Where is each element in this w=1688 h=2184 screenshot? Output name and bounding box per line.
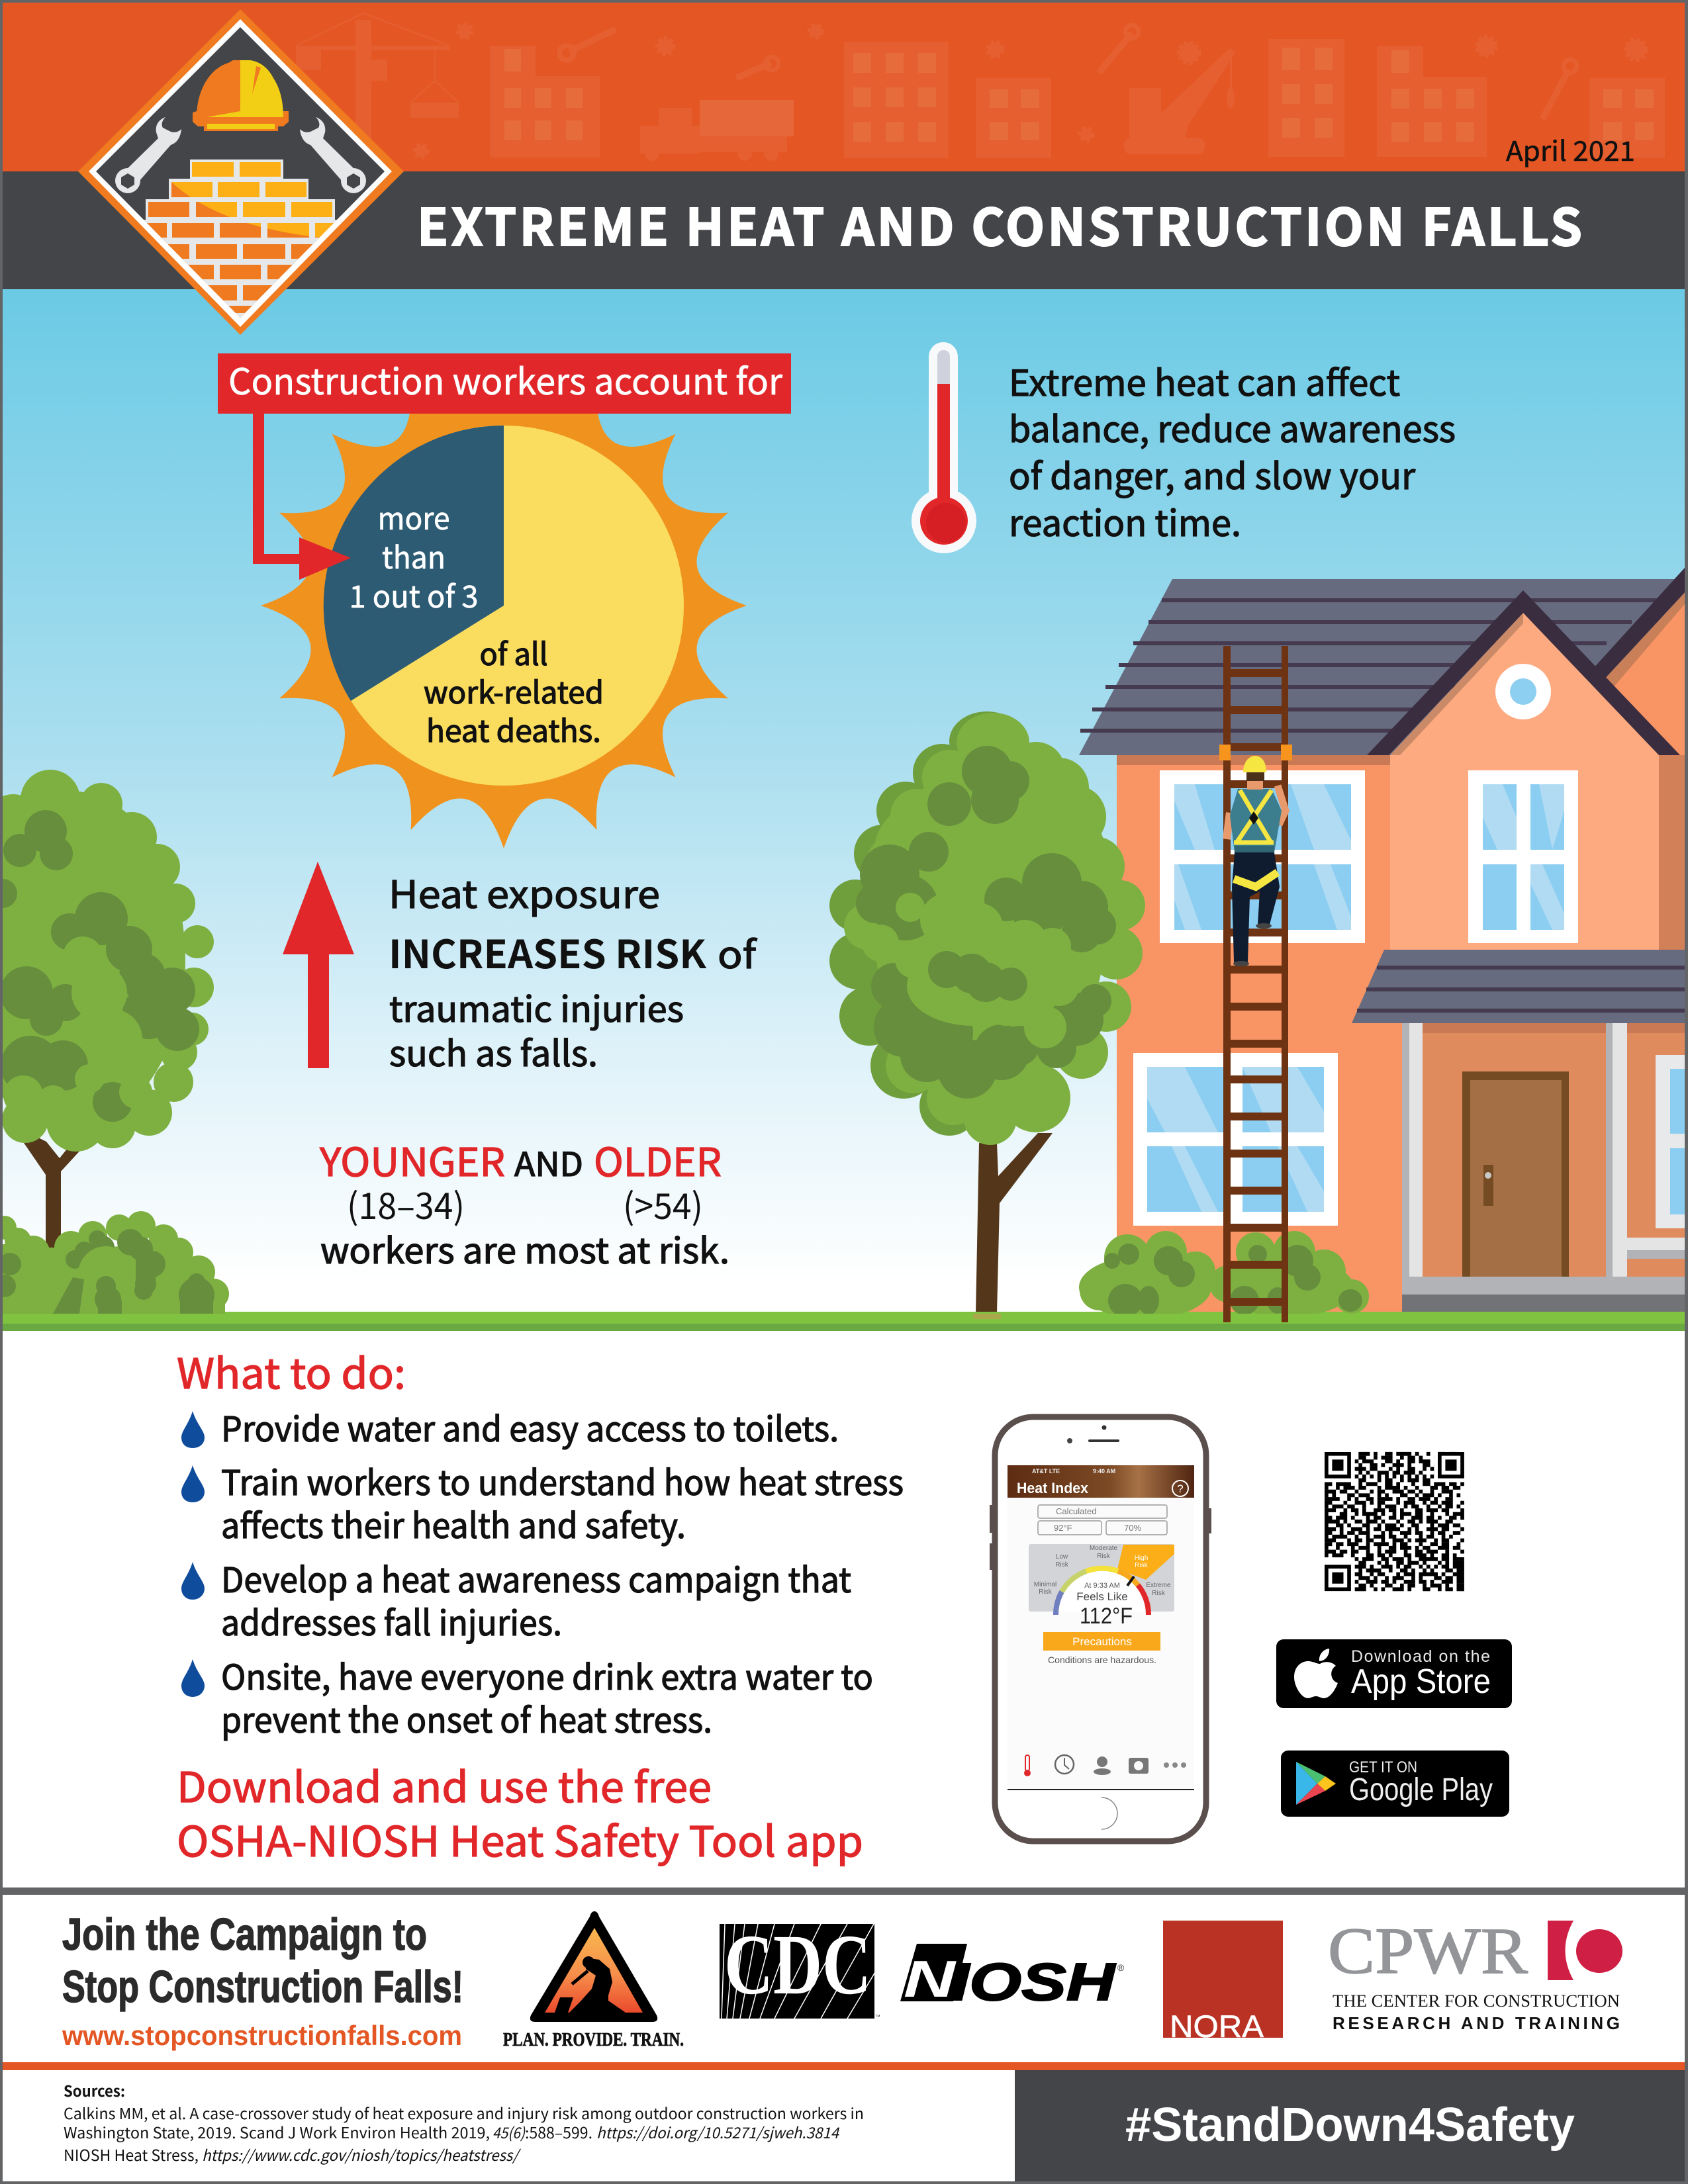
icon: up arrow xyxy=(283,862,354,1068)
logo: CPWR: THE CENTER FOR CONSTRUCTION xyxy=(1333,1991,1620,2011)
porch floor xyxy=(1402,1277,1685,1312)
home button xyxy=(1102,1797,1117,1829)
house xyxy=(1079,568,1688,1312)
heat gauge: At 9:33 AM xyxy=(1084,1582,1120,1590)
heat gauge: High xyxy=(1135,1555,1148,1562)
icon: brick wall xyxy=(144,159,337,318)
text: younger and older workers: OLDER xyxy=(594,1131,722,1187)
logo: NORA xyxy=(1163,1921,1283,2044)
pie label: of all work-related heat deaths: of all xyxy=(479,631,548,674)
text: heat exposure increases risk xyxy=(389,865,758,1077)
porch window xyxy=(1656,1055,1685,1228)
heat gauge xyxy=(1029,1544,1174,1629)
hashtag panel: #StandDown4Safety xyxy=(1125,2099,1575,2152)
campaign URL: www.stopconstructionfalls.com xyxy=(62,2020,462,2051)
logo: NIOSH: ® xyxy=(1117,1962,1125,1973)
list item: onsite water: Onsite, have everyone drink extra water to xyxy=(221,1650,873,1700)
text: extreme heat effects: reaction time. xyxy=(1009,494,1241,547)
app header: Heat Index xyxy=(1017,1480,1089,1496)
porch roof xyxy=(1352,950,1685,1023)
list item: onsite water: prevent the onset of heat stress. xyxy=(221,1693,712,1743)
icon: left wrench xyxy=(115,117,181,193)
sources: https://www.cdc.gov/niosh/topics/heatstress/ xyxy=(202,2143,522,2165)
date: April 2021 xyxy=(1506,129,1635,169)
call to action: download app: Download and use the free xyxy=(177,1754,712,1815)
list item: train workers xyxy=(221,1455,904,1548)
sources: Calkins MM, et al. A case-crossover study of heat exposure and injury risk among outdoor construction workers in xyxy=(64,2101,864,2124)
ground xyxy=(0,1312,1685,1331)
text: extreme heat effects: balance, reduce awareness xyxy=(1009,400,1456,453)
icon: water drop 3 xyxy=(181,1562,205,1600)
title: EXTREME HEAT AND CONSTRUCTION FALLS xyxy=(417,187,1582,261)
text: younger and older workers: YOUNGER xyxy=(319,1131,505,1187)
campaign headline: Join the Campaign to xyxy=(62,1909,427,1960)
sources xyxy=(64,2079,864,2165)
icon: water drop 2 xyxy=(181,1465,205,1502)
list item: train workers: affects their health and safety. xyxy=(221,1498,686,1548)
front door xyxy=(1462,1071,1569,1277)
heat gauge: Risk xyxy=(1039,1588,1053,1596)
sources: :588–599. xyxy=(525,2120,592,2143)
heat gauge: Extreme xyxy=(1146,1582,1171,1589)
orange divider xyxy=(0,2062,1688,2070)
logo: plan provide train triangle: PLAN. PROVIDE. TRAIN. xyxy=(503,2029,684,2050)
badge: Google Play: GET IT ON xyxy=(1349,1758,1417,1776)
logo: CDC: CDC xyxy=(724,1917,871,2013)
gray divider above footer xyxy=(0,1888,1688,1895)
callout: construction workers account for: Construction workers account for xyxy=(228,353,783,405)
text: younger and older workers: workers are most at risk. xyxy=(320,1224,729,1274)
heat gauge: Risk xyxy=(1055,1561,1069,1569)
arrow from callout into pie wedge xyxy=(253,414,351,580)
heat gauge: Risk xyxy=(1097,1553,1111,1560)
app tab bar xyxy=(1024,1755,1186,1776)
text: extreme heat effects: Extreme heat can affect xyxy=(1009,354,1400,406)
sources: Washington State, 2019. Scand J Work Environ Health 2019, xyxy=(64,2120,490,2143)
call to action: download app xyxy=(177,1754,863,1869)
main wall xyxy=(1117,755,1402,1312)
list item: onsite water xyxy=(221,1650,873,1743)
bush: left group xyxy=(3,1211,229,1314)
heat gauge: Minimal xyxy=(1034,1581,1056,1588)
sources: 45(6) xyxy=(492,2120,526,2143)
list item: provide water: Provide water and easy access to toilets. xyxy=(221,1402,839,1451)
badge: App Store xyxy=(1276,1639,1512,1708)
ladder xyxy=(1219,646,1292,1322)
sun with pie chart xyxy=(261,363,747,848)
input fields xyxy=(1038,1505,1167,1535)
worker on ladder xyxy=(1227,756,1286,966)
icon: thermometer xyxy=(912,342,976,553)
header orange band with construction silhouettes xyxy=(0,0,1688,171)
hashtag panel xyxy=(1015,2070,1688,2181)
text: extreme heat effects: of danger, and slow your xyxy=(1009,447,1416,500)
text: younger and older workers: (>54) xyxy=(623,1177,703,1230)
sources: Sources: xyxy=(64,2079,125,2101)
heading: what to do: What to do: xyxy=(177,1341,406,1401)
list item: develop campaign: addresses fall injuries. xyxy=(221,1596,562,1645)
QR code xyxy=(1325,1452,1464,1591)
app header xyxy=(1008,1465,1194,1498)
header dark title band xyxy=(0,171,1688,289)
logo: CPWR: RESEARCH AND TRAINING xyxy=(1333,2013,1620,2033)
precautions bar: Precautions xyxy=(1072,1635,1132,1648)
campaign headline: Stop Construction Falls! xyxy=(62,1962,463,2012)
text: younger and older workers: (18–34) xyxy=(347,1177,465,1230)
pie label: of all work-related heat deaths xyxy=(424,631,604,751)
porch wall xyxy=(1402,1023,1685,1277)
heat gauge: Risk xyxy=(1152,1590,1166,1597)
heat gauge: Low xyxy=(1056,1553,1068,1561)
logo: diamond badge with hard hat, wrenches and bricks xyxy=(78,9,404,335)
phone showing heat index app xyxy=(990,1417,1211,1841)
pie label: more than 1 out of 3 xyxy=(350,495,478,617)
phone showing heat index app: 70% xyxy=(1124,1523,1141,1533)
tree: left xyxy=(0,770,214,1257)
text: heat exposure increases risk: of xyxy=(718,925,758,979)
icon: play triangle xyxy=(1296,1762,1336,1805)
phone showing heat index app: 92°F xyxy=(1054,1523,1072,1533)
logo: CPWR: CPWR xyxy=(1328,1914,1528,1987)
pie label: of all work-related heat deaths: work-related xyxy=(424,669,604,713)
upper left window xyxy=(1160,770,1365,943)
heat gauge: Moderate xyxy=(1090,1545,1118,1552)
icon: water drop 4 xyxy=(181,1659,205,1697)
logo: CPWR xyxy=(1328,1914,1622,2033)
list item: develop campaign xyxy=(221,1553,851,1645)
list item: develop campaign: Develop a heat awareness campaign that xyxy=(221,1553,851,1602)
pie label: of all work-related heat deaths: heat deaths. xyxy=(426,707,601,751)
sources: https://doi.org/10.5271/sjweh.3814 xyxy=(596,2120,839,2143)
sky background xyxy=(0,289,1688,1314)
text: heat exposure increases risk: Heat exposure xyxy=(389,865,660,919)
upper right window xyxy=(1468,770,1578,943)
icon: roofer silhouette xyxy=(555,1956,626,2013)
list item: train workers: Train workers to understand how heat stress xyxy=(221,1455,904,1505)
badge: Google Play xyxy=(1281,1751,1509,1817)
round gable window xyxy=(1495,664,1551,719)
app header: AT&T LTE xyxy=(1032,1468,1060,1475)
heat gauge: 112°F xyxy=(1080,1604,1133,1629)
lower left window xyxy=(1133,1053,1338,1226)
icon: apple logo xyxy=(1294,1649,1338,1698)
call to action: download app: OSHA-NIOSH Heat Safety Tool app xyxy=(177,1809,863,1869)
porch pillars xyxy=(1402,1023,1627,1277)
precautions bar xyxy=(1043,1632,1160,1665)
pie label: more than 1 out of 3: 1 out of 3 xyxy=(350,573,478,617)
logo: NIOSH: IOSH xyxy=(951,1952,1117,2011)
logo: plan provide train triangle xyxy=(503,1911,684,2050)
text: heat exposure increases risk: INCREASES RISK xyxy=(389,923,707,979)
text: extreme heat effects xyxy=(1009,354,1456,547)
badge: App Store: App Store xyxy=(1351,1662,1491,1701)
icon: right wrench xyxy=(300,117,366,193)
logo: NIOSH xyxy=(900,1944,1125,2011)
pie label: more than 1 out of 3: more xyxy=(377,495,450,539)
app header: ? xyxy=(1177,1482,1184,1495)
pie label: more than 1 out of 3: than xyxy=(382,534,445,578)
gable wall xyxy=(1390,613,1659,950)
logo: CDC: ™ xyxy=(875,2014,880,2020)
campaign headline xyxy=(62,1909,463,2012)
text: younger and older workers xyxy=(319,1131,729,1274)
sources: NIOSH Heat Stress, xyxy=(64,2143,199,2165)
porch railing xyxy=(1627,1238,1685,1259)
text: heat exposure increases risk: such as falls. xyxy=(389,1026,598,1077)
tree: right xyxy=(829,711,1145,1313)
main roof xyxy=(1079,579,1685,755)
precautions bar: Conditions are hazardous. xyxy=(1048,1655,1156,1665)
heat gauge: Feels Like xyxy=(1076,1590,1128,1603)
icon: water drop 1 xyxy=(181,1411,205,1448)
bush: right group xyxy=(1079,1231,1369,1319)
text: younger and older workers: AND xyxy=(514,1138,583,1186)
logo: NIOSH: N xyxy=(904,1950,957,2008)
logo: NORA: NORA xyxy=(1170,2009,1264,2044)
badge: App Store: Download on the xyxy=(1351,1647,1490,1666)
app header: 9:40 AM xyxy=(1093,1468,1115,1475)
phone showing heat index app: Calculated xyxy=(1056,1506,1096,1516)
far right wing xyxy=(1589,600,1688,953)
badge: Google Play: Google Play xyxy=(1349,1772,1493,1807)
heat gauge: Risk xyxy=(1135,1562,1149,1569)
text: heat exposure increases risk: traumatic injuries xyxy=(389,982,684,1032)
icon: hard hat xyxy=(193,60,289,131)
